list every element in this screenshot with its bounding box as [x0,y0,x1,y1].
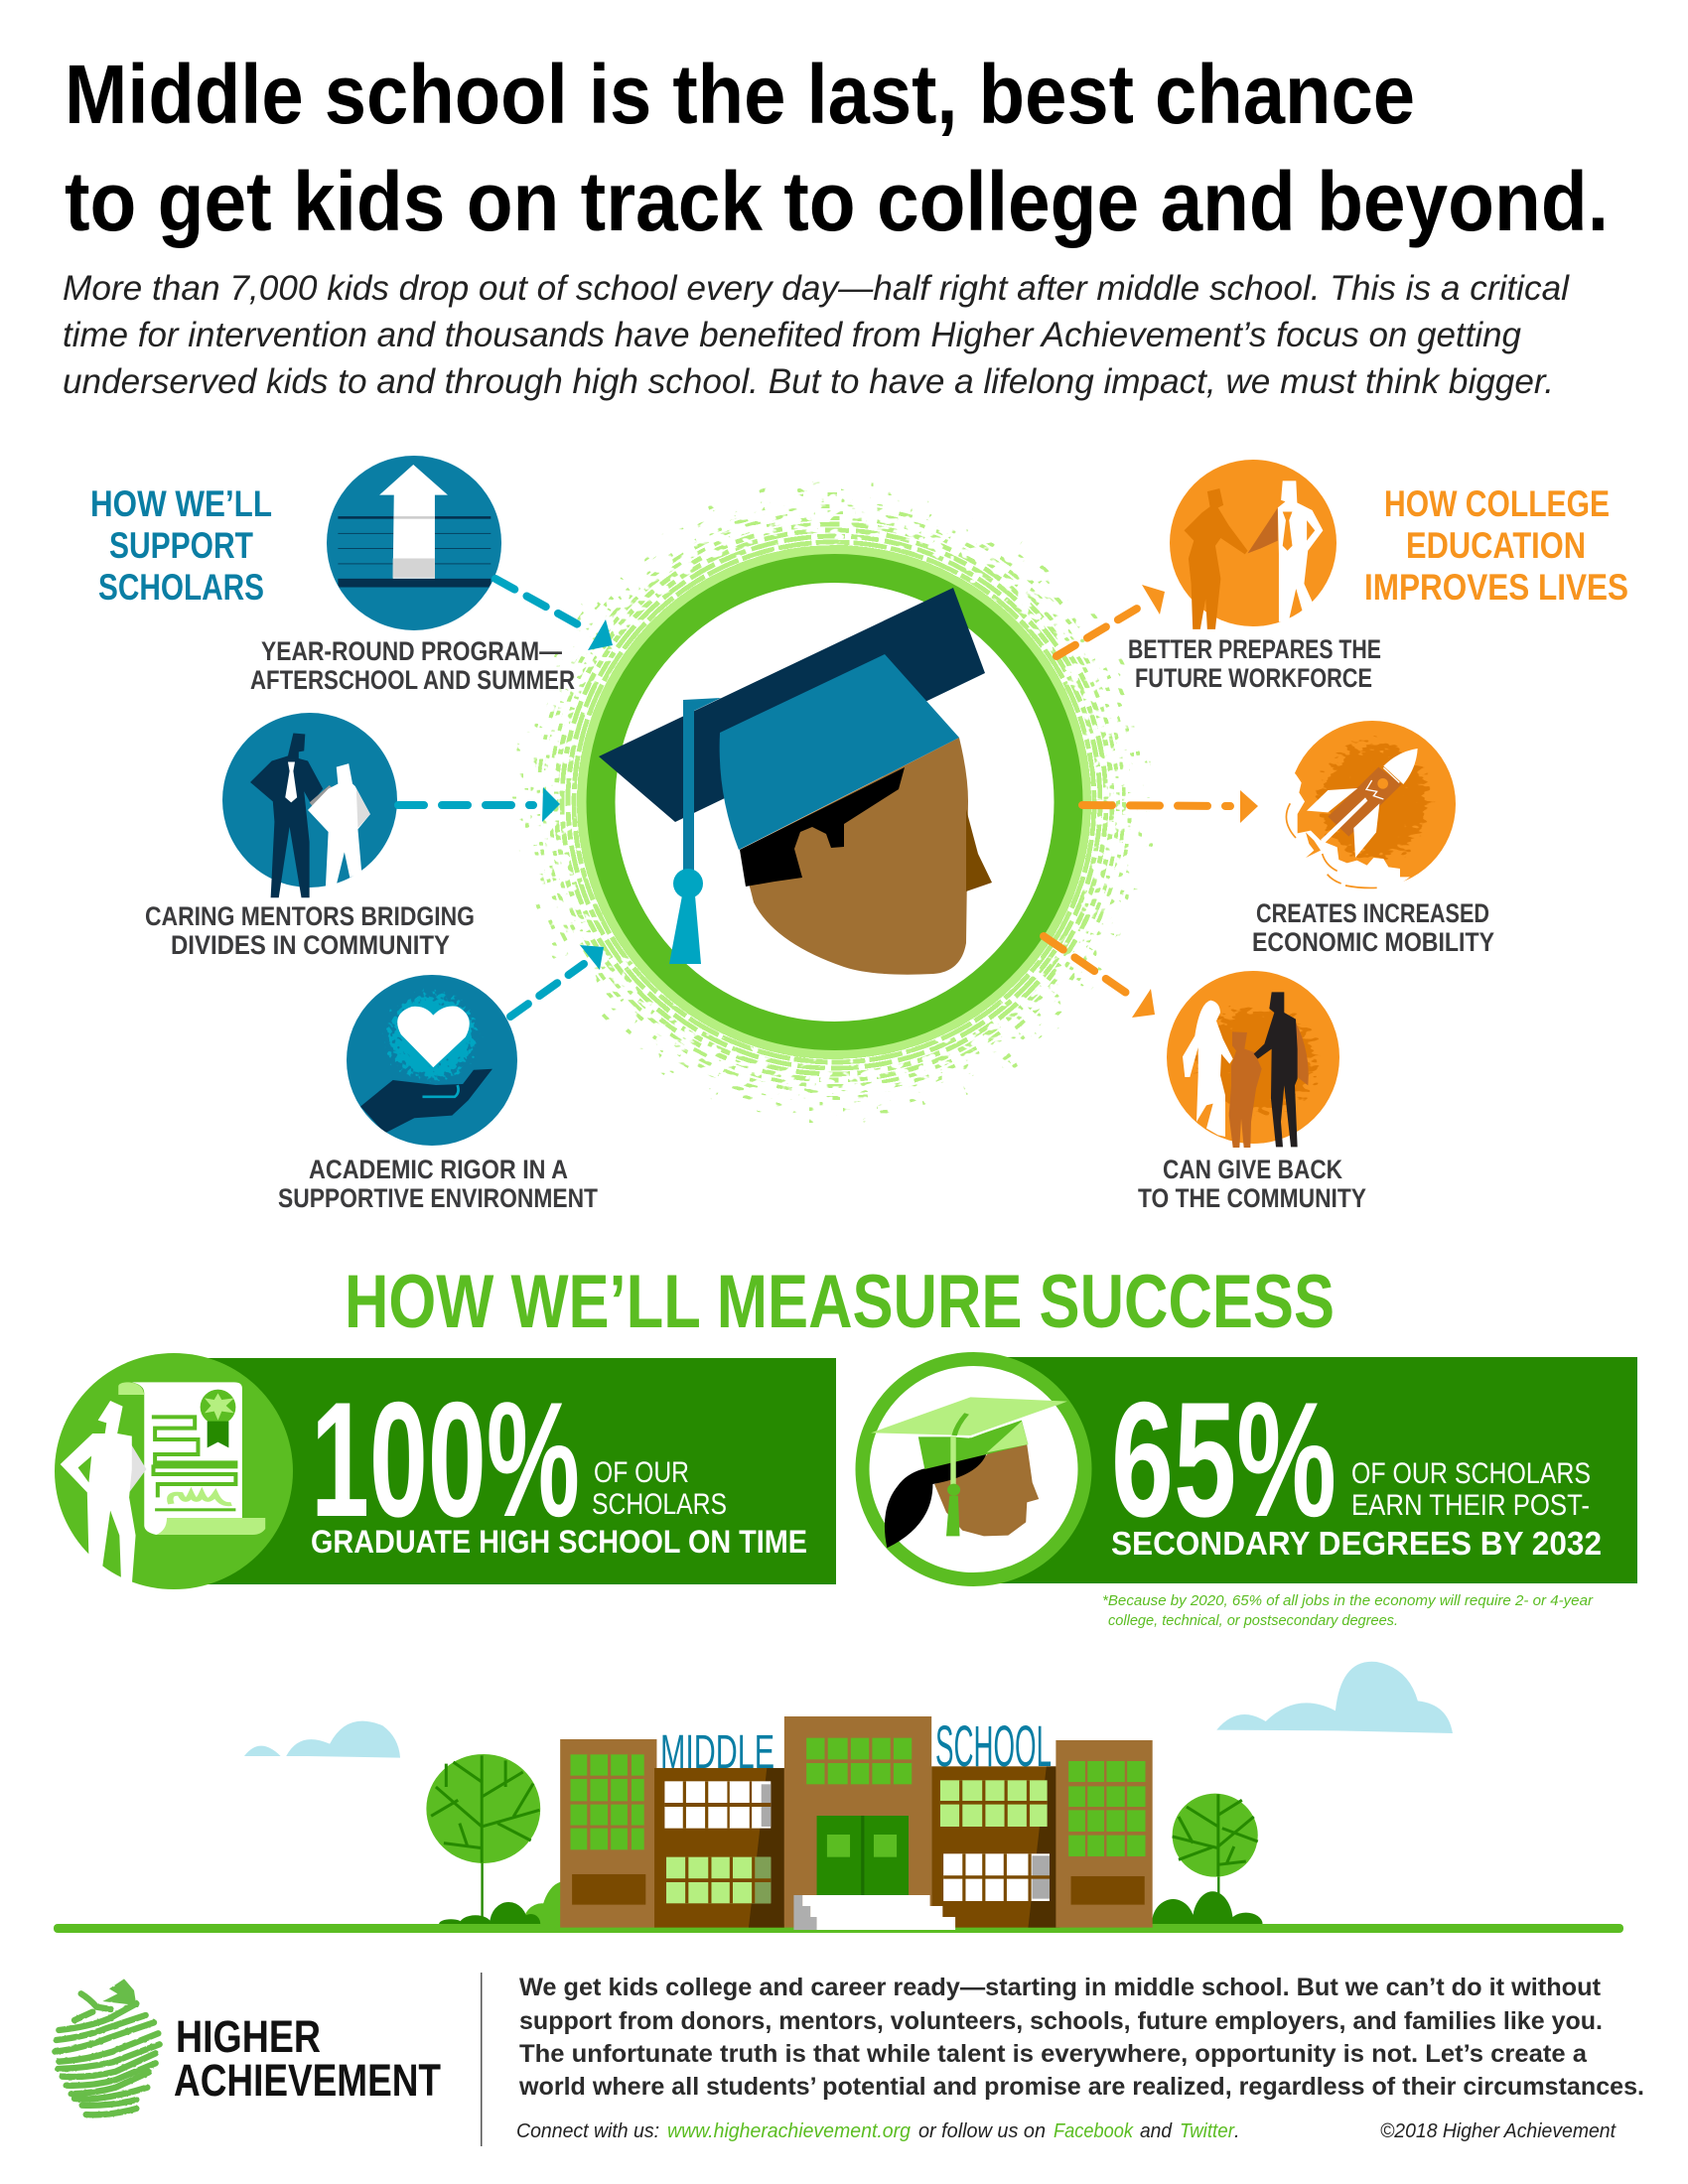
stat badge ring [862,1359,1084,1579]
stat text: OF OUR [594,1456,689,1489]
footnote: college, technical, or postsecondary degrees. [1108,1612,1398,1629]
nose [966,809,992,891]
intro paragraph: underserved kids to and through high school. But to have a lifelong impact, we must think bigger. [63,362,1554,401]
footer message [518,1974,1644,2101]
arrow: program to scholar [495,579,613,650]
title [65,48,1609,248]
label: caring mentors: DIVIDES IN COMMUNITY [171,930,450,960]
green ring [601,568,1068,1036]
building sign: MIDDLE [660,1726,774,1779]
arrow: scholar to community [1044,936,1155,1018]
icon: mentors [222,713,397,897]
arrow: scholar to workforce [1056,585,1165,656]
footer message: The unfortunate truth is that while talent is everywhere, opportunity is not. Let’s create a [519,2040,1588,2068]
head [740,738,968,975]
school building [560,1716,1153,1930]
intro paragraph [63,269,1570,401]
tassel [669,698,721,964]
icon: heart in hand [347,975,517,1146]
label: give back: CAN GIVE BACK [1163,1155,1342,1184]
label: future workforce: FUTURE WORKFORCE [1135,663,1372,693]
intro paragraph: time for intervention and thousands have benefited from Higher Achievement’s focus on getting [63,316,1522,354]
logo wordmark [174,2011,441,2106]
central graduate badge [599,568,1068,1036]
stat text: SCHOLARS [592,1488,727,1521]
connect line: Facebook [1054,2120,1134,2142]
intro paragraph: More than 7,000 kids drop out of school every day—half right after middle school. This is a critical [63,269,1570,308]
ground line [54,1924,1623,1933]
label: year-round program: YEAR-ROUND PROGRAM— [261,636,562,666]
icon: graduate with ponytail [871,1397,1067,1548]
cap top [720,654,959,850]
clouds, trees and bushes [244,1662,1453,1924]
label: future workforce: BETTER PREPARES THE [1128,634,1381,664]
label: give back [1138,1155,1366,1213]
panel: 65 percent stat [862,1357,1637,1583]
big number: 65% [1111,1368,1336,1551]
building sign [660,1714,1052,1779]
stat text: GRADUATE HIGH SCHOOL ON TIME [311,1524,807,1560]
logo mark [55,1979,160,2115]
icon: rocket [1278,721,1456,891]
heading: how we'll support scholars: SUPPORT [109,525,253,566]
footer divider [481,1973,483,2146]
icon: handshake [1170,460,1336,629]
label: economic mobility: CREATES INCREASED [1256,898,1489,928]
heading: how we'll support scholars [90,483,272,608]
footer message: world where all students’ potential and promise are realized, regardless of their circumstances. [518,2073,1644,2101]
big number: 100% [311,1368,580,1551]
footnote [1102,1592,1594,1629]
logo wordmark: HIGHER [176,2011,321,2062]
label: caring mentors: CARING MENTORS BRIDGING [145,901,475,931]
label: academic rigor: ACADEMIC RIGOR IN A [309,1155,568,1184]
copyright: ©2018 Higher Achievement [1380,2120,1617,2142]
label: future workforce [1128,634,1381,693]
icon: rising arrow [327,456,501,630]
heading: how college education improves lives: IMPROVES LIVES [1364,567,1628,608]
connect line: Connect with us: [516,2120,659,2142]
arrow: rigor to scholar [510,945,604,1017]
logo: higher achievement [55,1979,441,2115]
label: give back: TO THE COMMUNITY [1138,1183,1366,1213]
icon: scholar and diploma [61,1382,265,1585]
label: academic rigor [278,1155,598,1213]
cap board back [599,588,985,822]
stat text: SECONDARY DEGREES BY 2032 [1111,1525,1602,1562]
heading: how we'll support scholars: SCHOLARS [98,567,264,608]
footer message: We get kids college and career ready—starting in middle school. But we can’t do it without [519,1974,1602,2001]
heading: how college education improves lives: HOW COLLEGE [1384,483,1610,524]
connect line: Twitter [1180,2120,1235,2142]
stat text: EARN THEIR POST- [1351,1489,1590,1522]
icon: family [1167,971,1339,1148]
connect line: www.higherachievement.org [667,2120,911,2142]
label: year-round program [250,636,575,695]
arrow: mentors to scholar [398,787,560,822]
hair [740,767,905,887]
stat text: OF OUR SCHOLARS [1351,1457,1591,1490]
heading: how we'll measure success: HOW WE’LL MEASURE SUCCESS [345,1260,1335,1344]
heading: how college education improves lives [1364,483,1628,608]
footnote: *Because by 2020, 65% of all jobs in the economy will require 2- or 4-year [1102,1592,1594,1609]
panel: 100 percent stat [55,1353,836,1589]
connect line: . [1234,2120,1240,2142]
stat badge circle [55,1353,293,1589]
arrow: scholar to mobility [1082,790,1258,823]
stat text [1111,1457,1602,1562]
heading: how college education improves lives: EDUCATION [1406,525,1586,566]
label: economic mobility [1252,898,1494,957]
label: caring mentors [145,901,475,960]
illustration: school scene [54,1662,1623,1933]
title: Middle school is the last, best chance [65,48,1415,141]
connect line: and [1140,2120,1173,2142]
connect line [516,2120,1240,2142]
stippled halo around graduate [514,482,1154,1122]
label: academic rigor: SUPPORTIVE ENVIRONMENT [278,1183,598,1213]
footer message: support from donors, mentors, volunteers, schools, future employers, and families like you. [519,2007,1603,2035]
stat text [311,1456,807,1560]
label: year-round program: AFTERSCHOOL AND SUMMER [250,665,575,695]
connect line: or follow us on [918,2120,1046,2142]
heading: how we'll support scholars: HOW WE’LL [90,483,272,524]
logo wordmark: ACHIEVEMENT [174,2055,441,2106]
label: economic mobility: ECONOMIC MOBILITY [1252,927,1494,957]
illustration: school scene: SCHOOL [935,1714,1052,1779]
